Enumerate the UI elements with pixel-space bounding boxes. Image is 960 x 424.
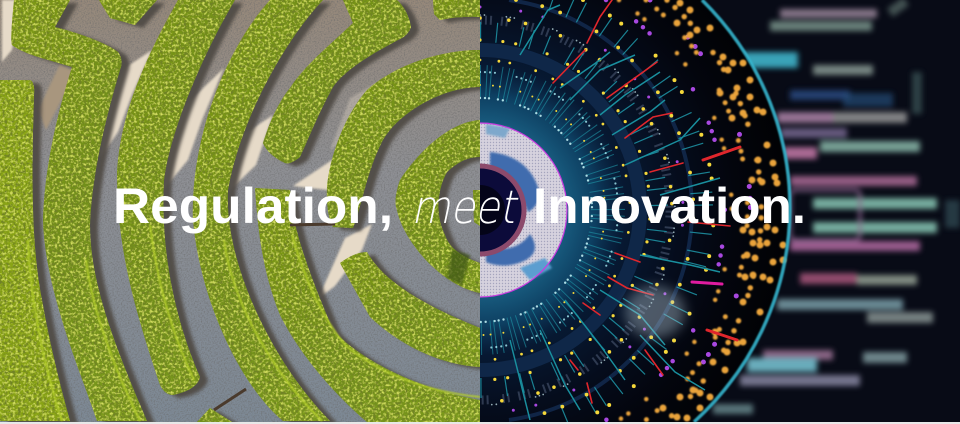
wooden bridge: [290, 224, 335, 225]
title part: Regulation: Regulation,: [113, 178, 393, 234]
hedge shadow patch: [447, 250, 470, 285]
title: [113, 178, 806, 234]
purple dots: [480, 0, 750, 420]
red circuit traces: [553, 0, 740, 403]
title part: Innovation: Innovation.: [533, 178, 806, 234]
yellow dots: [480, 0, 714, 420]
sunlit gravel patches: [2, 0, 385, 299]
teal circuit traces: [510, 5, 720, 420]
orb background: [480, 0, 790, 422]
iris magenta ring: [480, 122, 568, 298]
radial teal ticks: [480, 0, 702, 420]
white teal speckle rings: [480, 15, 675, 405]
wooden bridge lower: [214, 389, 246, 410]
maze hedges: [0, 0, 480, 422]
orange outer dots: [619, 0, 783, 420]
lit hedge edges: [28, 225, 480, 421]
blurred data bars: [713, 0, 960, 414]
pupil: [480, 164, 526, 256]
panel: digital eye: [480, 0, 960, 422]
cyan orb rim: [694, 0, 790, 422]
lens glow: [625, 286, 685, 338]
teal radial glow: [480, 73, 616, 347]
iris blue streaks: [486, 124, 552, 280]
title part: meet: meet: [409, 180, 524, 234]
mechanical rings: [480, 0, 692, 420]
panel: hedge maze photo: [0, 0, 480, 422]
iris: [480, 122, 568, 298]
